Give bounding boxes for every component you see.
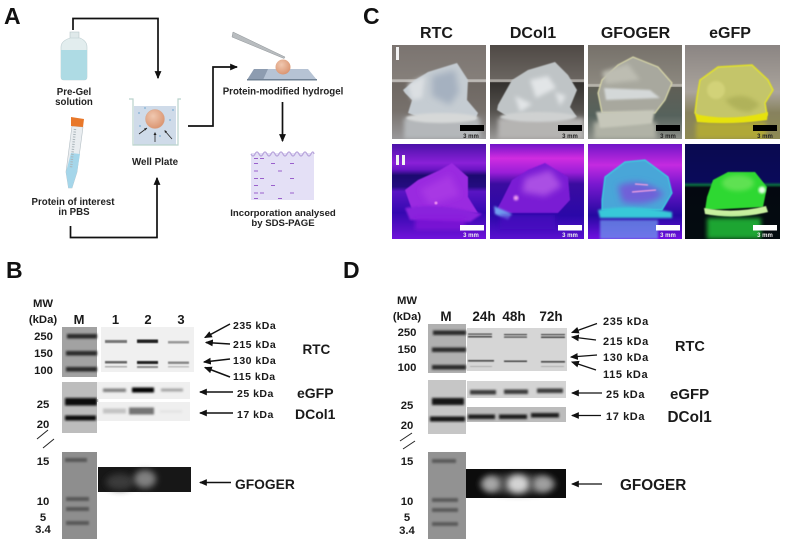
arrow and label: eGFP 25 kDa: 25 kDa xyxy=(606,389,645,401)
arrow: well plate to hydrogel xyxy=(188,67,237,126)
axis labels MW and ladder numbers: 25 xyxy=(37,399,49,411)
arrow and label: eGFP 25 kDa xyxy=(572,386,709,403)
column headings xyxy=(420,25,751,42)
photo: RTC UV xyxy=(392,144,486,239)
axis labels MW and ladder numbers: 150 xyxy=(34,348,53,360)
axis labels MW and ladder numbers: 5 xyxy=(404,512,410,524)
photo: RTC UV: 3 mm xyxy=(463,233,479,239)
arrow and label: GFOGER xyxy=(200,477,295,492)
blot: GFOGER xyxy=(466,469,566,498)
icon: hydrogel on slide with forceps xyxy=(232,32,317,80)
panel label B: B xyxy=(6,257,23,283)
axis labels MW and ladder numbers: 100 xyxy=(398,362,416,374)
panel label C: C xyxy=(363,3,380,29)
axis labels MW and ladder numbers: 3.4 xyxy=(399,525,416,537)
arrow and label: DCol1 17 kDa xyxy=(572,409,712,426)
arrow and label: DCol1 17 kDa: 17 kDa xyxy=(606,411,645,423)
photo: DCol1 daylight: 3 mm xyxy=(562,134,578,140)
photo: GFOGER daylight: 3 mm xyxy=(660,134,676,140)
photo: GFOGER daylight xyxy=(588,45,682,140)
panel label A: A xyxy=(4,3,21,29)
arrow and label: eGFP 25 kDa xyxy=(200,385,334,401)
blot: DCol1 xyxy=(97,402,190,421)
icon: SDS-PAGE gel xyxy=(251,152,314,200)
lane headers: 72h xyxy=(539,309,563,324)
arrow and label: eGFP 25 kDa: eGFP xyxy=(297,385,334,401)
axis labels MW and ladder numbers: MW xyxy=(33,298,53,310)
panel: C hydrogel photographs xyxy=(392,25,780,239)
label: incorporation analysed: by SDS-PAGE xyxy=(251,218,315,229)
axis labels MW and ladder numbers: 250 xyxy=(34,331,53,343)
arrow: bottle to well plate xyxy=(73,18,158,78)
marker lane: GFOGER xyxy=(428,452,466,539)
axis labels MW and ladder numbers: 100 xyxy=(34,365,53,377)
label: protein of interest: Protein of interest xyxy=(32,197,115,208)
column headings: RTC xyxy=(420,25,453,42)
icon: well plate xyxy=(129,99,181,145)
column headings: GFOGER xyxy=(601,25,671,42)
axis labels MW and ladder numbers xyxy=(29,298,57,536)
lane headers: 24h xyxy=(472,309,496,324)
RTC kDa labels: 130 kDa xyxy=(603,352,649,364)
arrow and label: GFOGER: GFOGER xyxy=(235,477,295,492)
photo: DCol1 UV: 3 mm xyxy=(562,233,578,239)
photo: RTC daylight xyxy=(392,45,486,140)
arrows: RTC bands xyxy=(204,324,230,377)
arrow: tube to well plate xyxy=(70,178,157,238)
photo: eGFP daylight: 3 mm xyxy=(757,134,773,140)
label: RTC: RTC xyxy=(302,342,330,357)
column headings: DCol1 xyxy=(510,25,556,42)
photo: DCol1 UV xyxy=(490,144,584,239)
column headings: eGFP xyxy=(709,25,751,42)
label: well plate: Well Plate xyxy=(132,157,179,168)
axis labels MW and ladder numbers: 20 xyxy=(401,420,413,432)
arrow: hydrogel to SDS-PAGE xyxy=(282,102,284,141)
photo: GFOGER UV xyxy=(588,144,682,239)
RTC kDa labels: 235 kDa xyxy=(603,316,649,328)
arrow and label: eGFP 25 kDa: 25 kDa xyxy=(237,388,274,400)
axis break mark xyxy=(37,430,54,448)
RTC kDa labels: 235 kDa xyxy=(233,320,276,332)
lane headers: 2 xyxy=(144,312,152,327)
arrow and label: GFOGER xyxy=(572,477,686,494)
label: protein of interest: in PBS xyxy=(58,207,90,218)
icon: pre-gel bottle xyxy=(61,32,87,80)
label: RTC: RTC xyxy=(675,339,705,355)
label: incorporation analysed: Incorporation analysed xyxy=(230,208,336,219)
lane headers: 1 xyxy=(112,312,119,327)
photo: GFOGER UV: 3 mm xyxy=(660,233,676,239)
photo: DCol1 daylight xyxy=(490,45,584,140)
RTC kDa labels: 215 kDa xyxy=(233,339,276,351)
blot: DCol1 xyxy=(467,407,566,422)
axis break mark xyxy=(400,433,415,449)
lane headers xyxy=(74,312,185,327)
blot: eGFP xyxy=(467,381,566,398)
row label II xyxy=(396,155,405,165)
blot: RTC xyxy=(101,327,194,372)
axis labels MW and ladder numbers: 10 xyxy=(37,496,49,508)
RTC kDa labels: 115 kDa xyxy=(233,371,276,383)
lane headers: M xyxy=(440,309,452,324)
axis labels MW and ladder numbers: 5 xyxy=(40,512,46,524)
blot: RTC xyxy=(467,328,567,371)
photo: eGFP UV xyxy=(685,144,780,239)
axis labels MW and ladder numbers: 150 xyxy=(398,344,416,356)
lane headers: 48h xyxy=(502,309,526,324)
marker lane: eGFP DCol1 xyxy=(62,382,97,433)
label: pre-gel solution: solution xyxy=(55,97,93,108)
row label I xyxy=(396,47,399,60)
marker lane: RTC xyxy=(62,327,97,377)
blot: GFOGER xyxy=(98,467,191,492)
RTC kDa labels xyxy=(603,316,649,381)
marker lane: eGFP DCol1 xyxy=(428,380,466,434)
blot: eGFP xyxy=(97,382,190,399)
axis labels MW and ladder numbers: (kDa) xyxy=(393,311,421,323)
photo: RTC daylight: 3 mm xyxy=(463,134,479,140)
arrow and label: GFOGER: GFOGER xyxy=(620,477,686,494)
panel label D: D xyxy=(343,257,360,283)
lane headers: 3 xyxy=(177,312,185,327)
icon: falcon tube xyxy=(66,117,84,188)
axis labels MW and ladder numbers xyxy=(393,295,421,537)
arrows: RTC bands xyxy=(571,324,597,370)
arrow and label: DCol1 17 kDa: DCol1 xyxy=(295,406,336,422)
arrow and label: DCol1 17 kDa xyxy=(200,406,336,422)
axis labels MW and ladder numbers: (kDa) xyxy=(29,314,57,326)
arrow and label: DCol1 17 kDa: DCol1 xyxy=(668,409,712,426)
RTC kDa labels xyxy=(233,320,276,383)
axis labels MW and ladder numbers: 25 xyxy=(401,400,413,412)
label: protein-modified hydrogel: Protein-modified hydrogel xyxy=(223,86,343,98)
axis labels MW and ladder numbers: 10 xyxy=(401,496,413,508)
arrow and label: DCol1 17 kDa: 17 kDa xyxy=(237,409,274,421)
panel: B western blots xyxy=(29,298,336,539)
marker lane: GFOGER xyxy=(62,452,97,539)
panel: A workflow schematic xyxy=(32,18,343,238)
lane headers: M xyxy=(74,312,84,327)
RTC kDa labels: 130 kDa xyxy=(233,355,276,367)
label: pre-gel solution: Pre-Gel xyxy=(57,87,91,98)
axis labels MW and ladder numbers: 3.4 xyxy=(35,524,52,536)
axis labels MW and ladder numbers: MW xyxy=(397,295,417,307)
axis labels MW and ladder numbers: 250 xyxy=(398,327,416,339)
marker lane: RTC xyxy=(428,324,466,373)
RTC kDa labels: 115 kDa xyxy=(603,369,648,381)
RTC kDa labels: 215 kDa xyxy=(603,336,649,348)
photo: eGFP UV: 3 mm xyxy=(757,233,773,239)
axis labels MW and ladder numbers: 15 xyxy=(401,456,413,468)
arrow and label: eGFP 25 kDa: eGFP xyxy=(670,386,709,403)
lane headers xyxy=(440,309,563,324)
axis labels MW and ladder numbers: 15 xyxy=(37,456,49,468)
panel: D western blots xyxy=(393,295,712,539)
axis labels MW and ladder numbers: 20 xyxy=(37,419,49,431)
photo: eGFP daylight xyxy=(685,45,780,140)
